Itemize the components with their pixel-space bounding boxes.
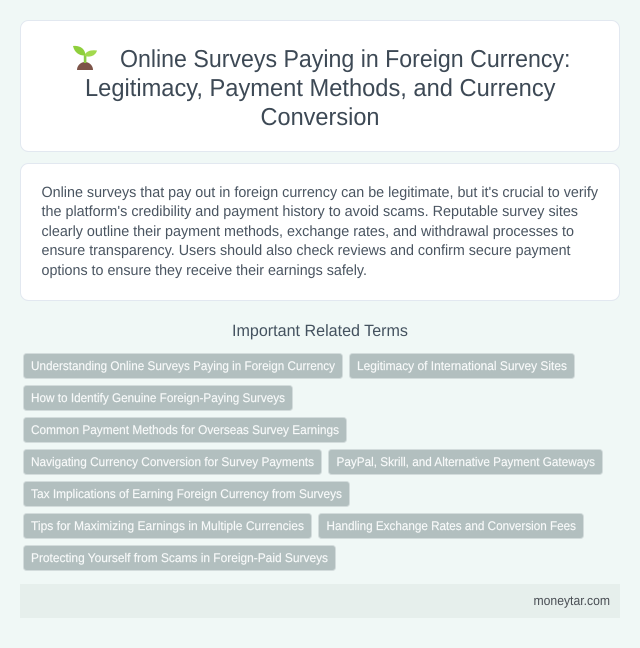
- description text: Online surveys that pay out in foreign currency can be legitimate, but it's crucial to verify: [42, 185, 599, 201]
- icon: seedling: [73, 46, 97, 70]
- tag: payment gateways: PayPal, Skrill, and Alternative Payment Gateways: [336, 455, 595, 469]
- tag: tax implications: [24, 482, 350, 506]
- description text: [42, 185, 599, 279]
- tag: payment methods: Common Payment Methods for Overseas Survey Earnings: [31, 423, 339, 437]
- tag: understanding online surveys: [24, 354, 342, 378]
- description text: the platform's credibility and payment history to avoid scams. Reputable survey sites: [42, 204, 578, 220]
- footer source text: moneytar.com: [534, 593, 610, 608]
- tag: legitimacy: Legitimacy of International Survey Sites: [357, 359, 567, 373]
- tag: identify genuine surveys: How to Identify Genuine Foreign-Paying Surveys: [31, 391, 285, 405]
- description text: ensure transparency. Users should also check reviews and confirm secure payment: [42, 243, 570, 259]
- tag: protecting from scams: [24, 546, 336, 570]
- panel: title card: [20, 20, 620, 152]
- tag: legitimacy: [350, 354, 574, 378]
- tag: currency conversion: Navigating Currency Conversion for Survey Payments: [31, 455, 314, 469]
- title: Online Surveys Paying in Foreign Currency:: [120, 46, 570, 73]
- panel: description card: [20, 164, 620, 300]
- tag: tax implications: Tax Implications of Earning Foreign Currency from Surveys: [31, 487, 342, 501]
- title: [85, 46, 570, 131]
- tag: identify genuine surveys: [24, 386, 292, 410]
- tag: protecting from scams: Protecting Yourself from Scams in Foreign-Paid Surveys: [31, 551, 328, 565]
- title: Conversion: [260, 104, 380, 131]
- panel: related term tags: [24, 354, 602, 570]
- tag: exchange rates: [318, 514, 584, 538]
- tag: payment methods: [24, 418, 346, 442]
- title: Legitimacy, Payment Methods, and Currency: [85, 75, 556, 102]
- footer bar: [20, 584, 620, 618]
- tag: maximizing earnings: [24, 514, 312, 538]
- tag: maximizing earnings: Tips for Maximizing Earnings in Multiple Currencies: [31, 519, 304, 533]
- description text: clearly outline their payment methods, exchange rates, and withdrawal processes to: [42, 224, 574, 240]
- tag: exchange rates: Handling Exchange Rates and Conversion Fees: [326, 519, 576, 533]
- tag: currency conversion: [24, 450, 322, 474]
- heading: important related terms: Important Related Terms: [232, 322, 408, 340]
- tag: payment gateways: [328, 450, 602, 474]
- tag: understanding online surveys: Understanding Online Surveys Paying in Foreign Currency: [31, 359, 336, 373]
- description text: options to ensure they receive their earnings safely.: [42, 263, 367, 279]
